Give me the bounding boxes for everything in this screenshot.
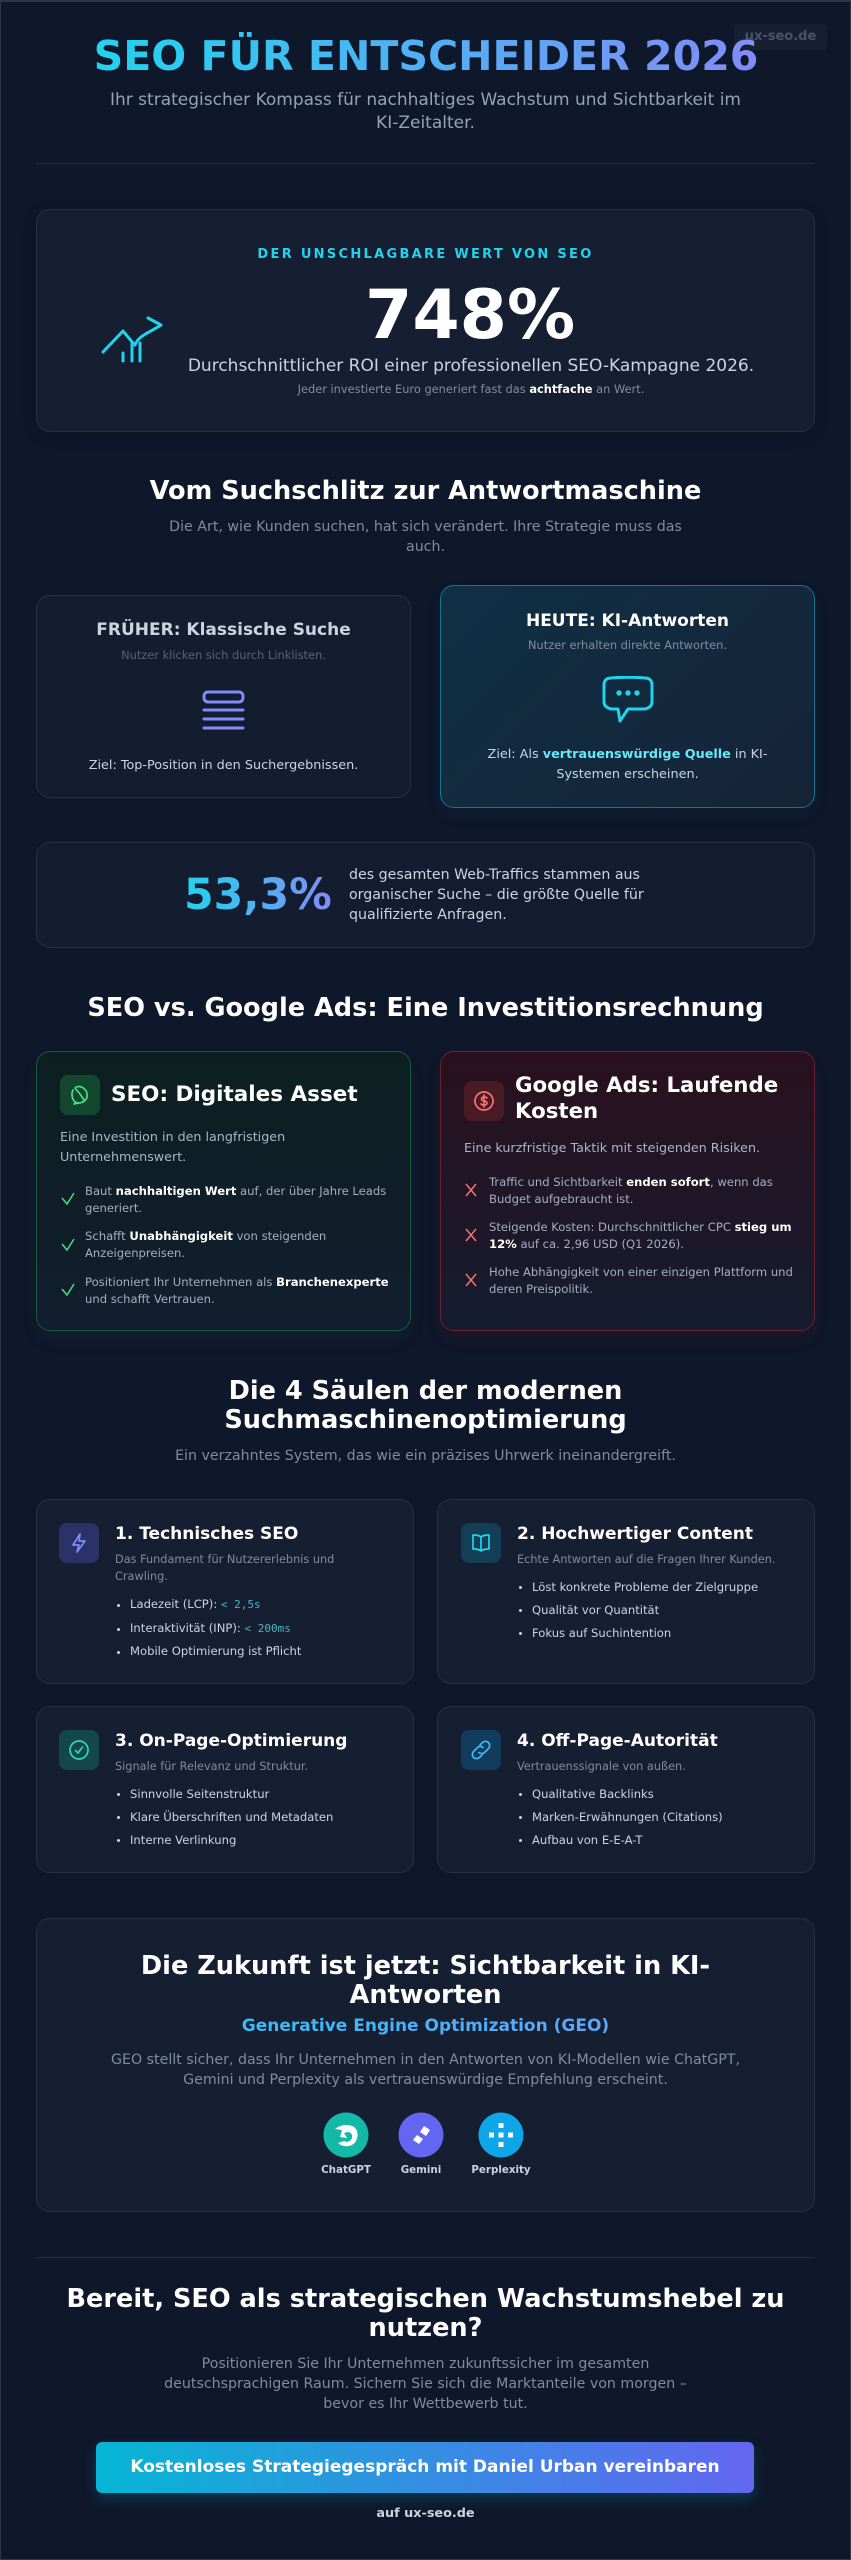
panel: Google Ads costs — [440, 1051, 815, 1331]
CTA text: Positionieren Sie Ihr Unternehmen zukunftssicher im gesamten — [202, 2356, 649, 2372]
list item: Steigende Kosten: Durchschnittlicher CPC stieg um — [489, 1220, 792, 1234]
panel: pillar 3 — [36, 1706, 414, 1873]
panel: pillar 2 — [437, 1499, 815, 1684]
list item: generiert. — [85, 1201, 142, 1215]
card title: HEUTE: KI-Antworten — [526, 611, 729, 631]
section intro: Die Art, wie Kunden suchen, hat sich verändert. Ihre Strategie muss das — [169, 519, 682, 535]
stat text: organischer Suche – die größte Quelle für — [349, 887, 644, 903]
CTA button: Kostenloses Strategiegespräch mit Daniel Urban vereinbaren — [130, 2457, 720, 2477]
list item: Traffic und Sichtbarkeit enden sofort, wenn das — [489, 1175, 773, 1189]
card goal: Ziel: Als vertrauenswürdige Quelle in KI- — [488, 747, 767, 762]
card subtitle: Nutzer klicken sich durch Linklisten. — [121, 648, 326, 662]
stat text — [349, 867, 644, 923]
card description — [60, 1129, 285, 1164]
list item — [62, 1229, 326, 1260]
subtitle: Ihr strategischer Kompass für nachhaltiges Wachstum und Sichtbarkeit im — [110, 90, 741, 110]
heading: SEO vs Ads: SEO vs. Google Ads: Eine Investitionsrechnung — [87, 993, 764, 1023]
panel: traffic stat — [36, 842, 815, 948]
GEO heading: Die Zukunft ist jetzt: Sichtbarkeit in KI- — [141, 1951, 710, 1981]
GEO description: Gemini und Perplexity als vertrauenswürdige Empfehlung erscheint. — [183, 2072, 668, 2088]
bullet list: Qualitative Backlinks — [532, 1787, 654, 1801]
pillar description — [115, 1553, 334, 1583]
bullet list: Interaktivität (INP): < 200ms — [130, 1621, 291, 1635]
stat text: qualifizierte Anfragen. — [349, 907, 507, 923]
list item: Baut nachhaltigen Wert auf, der über Jahre Leads — [85, 1184, 386, 1198]
logo: Perplexity — [471, 2112, 531, 2176]
card heading: Kosten — [515, 1099, 598, 1124]
pillar heading: 1. Technisches SEO — [115, 1524, 298, 1544]
panel: früher — [36, 595, 411, 798]
pillar description: Echte Antworten auf die Fragen Ihrer Kunden. — [517, 1553, 775, 1566]
card description: Eine Investition in den langfristigen — [60, 1129, 285, 1144]
heading: 4 Säulen: Suchmaschinenoptimierung — [224, 1405, 627, 1435]
GEO heading: Antworten — [350, 1980, 501, 2010]
icon: dollar — [464, 1081, 504, 1121]
card goal: Ziel: Top-Position in den Suchergebnissen. — [89, 758, 358, 773]
pillar description: Crawling. — [115, 1570, 168, 1583]
icon: growth chart — [101, 316, 163, 362]
icon: link — [461, 1730, 501, 1770]
icon: chat bubble — [602, 676, 654, 723]
CTA text: bevor es Ihr Wettbewerb tut. — [323, 2396, 528, 2412]
CTA text — [164, 2356, 687, 2412]
list item: deren Preispolitik. — [489, 1282, 593, 1296]
bullet list: Klare Überschriften und Metadaten — [130, 1810, 333, 1824]
logo: Gemini — [398, 2112, 444, 2176]
watermark badge: ux-seo.de: ux-seo.de — [745, 29, 816, 44]
card description: Unternehmenswert. — [60, 1149, 186, 1164]
logo: ChatGPT — [321, 2112, 371, 2176]
list item: 12% auf ca. 2,96 USD (Q1 2026). — [489, 1237, 684, 1251]
list item: Hohe Abhängigkeit von einer einzigen Plattform und — [489, 1265, 793, 1279]
hero eyebrow: DER UNSCHLAGBARE WERT VON SEO — [257, 247, 594, 262]
hero note: Jeder investierte Euro generiert fast das achtfache an Wert. — [298, 382, 644, 396]
card description: Eine kurzfristige Taktik mit steigenden Risiken. — [464, 1140, 760, 1155]
bullet list — [117, 1597, 302, 1658]
panel: heute — [440, 585, 815, 808]
footer source: auf ux-seo.de — [376, 2506, 475, 2521]
card title: FRÜHER: Klassische Suche — [96, 620, 351, 640]
icon: refresh asset — [60, 1075, 100, 1115]
list item — [62, 1275, 389, 1306]
icon: lightning — [59, 1523, 99, 1563]
bullet list: Sinnvolle Seitenstruktur — [130, 1787, 269, 1801]
GEO heading — [141, 1951, 710, 2010]
card heading — [515, 1073, 778, 1124]
list item: Budget aufgebraucht ist. — [489, 1192, 633, 1206]
bullet list: Löst konkrete Probleme der Zielgruppe — [532, 1580, 758, 1594]
section intro: auch. — [406, 539, 445, 555]
card goal — [488, 747, 767, 782]
hero number: 748% — [365, 276, 575, 355]
card heading: Google Ads: Laufende — [515, 1073, 778, 1098]
bullet list: Marken-Erwähnungen (Citations) — [532, 1810, 723, 1824]
heading: 4 Säulen — [224, 1376, 627, 1435]
GEO subheading: Generative Engine Optimization (GEO) — [242, 2016, 609, 2036]
label: Perplexity — [471, 2164, 531, 2176]
heading: call to action: Bereit, SEO als strategischen Wachstumshebel zu — [66, 2284, 785, 2314]
icon: check badge — [59, 1730, 99, 1770]
card goal: Systemen erscheinen. — [556, 767, 699, 782]
list item — [62, 1184, 386, 1215]
panel: SEO asset — [36, 1051, 411, 1331]
CTA button — [96, 2442, 754, 2493]
bullet list: Aufbau von E-E-A-T — [532, 1833, 642, 1847]
subtitle: KI-Zeitalter. — [376, 113, 475, 133]
hero caption: Durchschnittlicher ROI einer professionellen SEO-Kampagne 2026. — [188, 356, 754, 376]
bullet list — [519, 1787, 723, 1847]
section intro: Ein verzahntes System, das wie ein präzises Uhrwerk ineinandergreift. — [175, 1448, 676, 1464]
list item — [466, 1175, 773, 1206]
stat text: des gesamten Web-Traffics stammen aus — [349, 867, 640, 883]
bullet list — [117, 1787, 333, 1847]
heading: Suchschlitz: Vom Suchschlitz zur Antwortmaschine — [150, 476, 701, 506]
GEO description: GEO stellt sicher, dass Ihr Unternehmen in den Antworten von KI-Modellen wie ChatGPT, — [111, 2052, 740, 2068]
pillar heading: 2. Hochwertiger Content — [517, 1524, 753, 1544]
label: ChatGPT — [321, 2164, 371, 2176]
bullet list: Qualität vor Quantität — [532, 1603, 659, 1617]
card subtitle: Nutzer erhalten direkte Antworten. — [528, 638, 727, 652]
list item: Positioniert Ihr Unternehmen als Branchenexperte — [85, 1275, 389, 1289]
CTA text: deutschsprachigen Raum. Sichern Sie sich die Marktanteile von morgen – — [164, 2376, 687, 2392]
panel: ROI hero — [36, 209, 815, 432]
panel: pillar 1 — [36, 1499, 414, 1684]
label: Gemini — [401, 2164, 441, 2176]
pillar description: Das Fundament für Nutzererlebnis und — [115, 1553, 334, 1566]
bullet list: Fokus auf Suchintention — [532, 1626, 671, 1640]
title: SEO FÜR ENTSCHEIDER 2026 — [94, 32, 758, 80]
stat number: 53,3% — [184, 870, 332, 920]
heading: call to action: nutzen? — [368, 2313, 482, 2343]
bullet list: Interne Verlinkung — [130, 1833, 236, 1847]
pillar description: Signale für Relevanz und Struktur. — [115, 1760, 308, 1773]
GEO description — [111, 2052, 740, 2088]
heading: 4 Säulen: Die 4 Säulen der modernen — [229, 1376, 622, 1406]
list item: Anzeigenpreisen. — [85, 1246, 185, 1260]
bullet list: Ladezeit (LCP): < 2,5s — [130, 1597, 261, 1611]
bullet list: Mobile Optimierung ist Pflicht — [130, 1644, 301, 1658]
watermark badge: ux-seo.de — [734, 24, 827, 50]
pillar heading: 3. On-Page-Optimierung — [115, 1731, 347, 1751]
heading: call to action — [66, 2284, 785, 2343]
list item — [466, 1265, 793, 1296]
icon: list — [202, 690, 244, 730]
pillar description: Vertrauenssignale von außen. — [517, 1760, 686, 1773]
list item: Schafft Unabhängigkeit von steigenden — [85, 1229, 326, 1243]
list item — [466, 1220, 792, 1251]
bullet list — [519, 1580, 758, 1640]
list item: und schafft Vertrauen. — [85, 1292, 215, 1306]
card heading: SEO: Digitales Asset — [111, 1082, 358, 1107]
pillar heading: 4. Off-Page-Autorität — [517, 1731, 718, 1751]
panel: GEO — [36, 1918, 815, 2212]
subtitle — [110, 90, 741, 133]
icon: book — [461, 1523, 501, 1563]
panel: pillar 4 — [437, 1706, 815, 1873]
section intro — [169, 519, 682, 555]
